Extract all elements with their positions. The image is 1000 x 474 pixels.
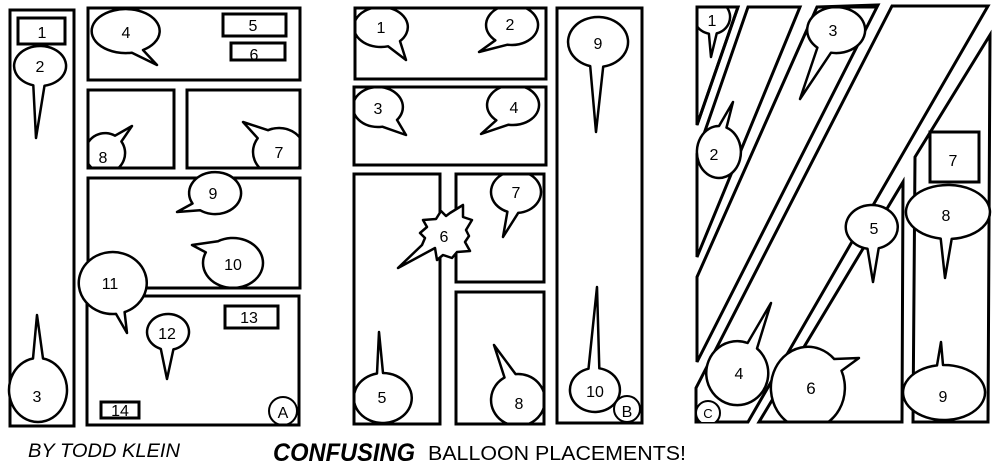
balloon 3 xyxy=(353,87,406,135)
balloon 4 xyxy=(92,9,160,65)
balloon 9 xyxy=(568,17,628,132)
balloon 3: 3 xyxy=(374,101,383,118)
panel: A middle right xyxy=(187,90,305,176)
panel: C 1 triangle xyxy=(694,0,738,125)
balloon 10 xyxy=(570,287,620,412)
page B xyxy=(353,5,642,426)
balloon 7: 7 xyxy=(275,145,284,162)
title xyxy=(273,439,686,467)
label C xyxy=(696,401,720,425)
page A xyxy=(9,8,305,426)
balloon 4 xyxy=(706,303,771,405)
balloon 12 xyxy=(147,314,189,379)
balloon 8: 8 xyxy=(515,396,524,413)
caption box 13: 13 xyxy=(240,310,258,327)
panel: C 6 xyxy=(759,182,903,422)
balloon 1 xyxy=(354,7,408,60)
panel: A top xyxy=(88,8,300,80)
title: BALLOON PLACEMENTS! xyxy=(428,443,686,465)
page label B: B xyxy=(622,404,632,421)
balloon 9 xyxy=(177,172,241,214)
credit: BY TODD KLEIN xyxy=(28,441,180,462)
balloon 3: 3 xyxy=(829,23,838,40)
balloon 10: 10 xyxy=(586,384,604,401)
balloon 3 xyxy=(800,7,878,99)
balloon 4: 4 xyxy=(122,25,131,42)
page label A xyxy=(269,397,297,425)
panel: A middle left xyxy=(85,90,174,173)
caption box 6: 6 xyxy=(250,47,259,64)
caption box 5: 5 xyxy=(249,18,258,35)
page C xyxy=(694,0,990,429)
balloon 6: 6 xyxy=(806,379,816,398)
balloon 1: 1 xyxy=(377,20,386,37)
panel: A bottom xyxy=(87,296,299,425)
balloon 6: burst xyxy=(398,205,472,268)
balloon 4: 4 xyxy=(510,100,519,117)
balloon 12: 12 xyxy=(158,326,176,343)
balloon 6: burst: 6 xyxy=(440,229,449,246)
panel: B centre right xyxy=(456,171,544,282)
balloon 10 xyxy=(192,238,263,288)
balloon 5 xyxy=(846,205,898,282)
balloon 9: 9 xyxy=(209,186,218,203)
panel: A tall left xyxy=(9,10,74,426)
caption box 14: 14 xyxy=(111,403,129,420)
panel: B lower left xyxy=(354,174,440,424)
balloon 11 xyxy=(79,252,147,333)
balloon 4 xyxy=(481,85,539,134)
panel: B tall right xyxy=(557,8,642,423)
balloon 5: 5 xyxy=(870,221,879,238)
panel: C 4 xyxy=(696,6,988,422)
balloon 5 xyxy=(354,332,412,423)
balloon 8 xyxy=(906,185,990,278)
panel: A wide xyxy=(88,172,300,288)
balloon 2 xyxy=(697,102,741,178)
label C: C xyxy=(703,406,713,421)
panel: B second xyxy=(353,85,546,165)
balloon 9 xyxy=(903,342,985,420)
panel: B lower right xyxy=(456,292,545,426)
panel: C 7 8 9 xyxy=(913,35,990,422)
caption box 7 xyxy=(930,132,979,182)
panel: C 3 xyxy=(697,5,878,362)
page label A: A xyxy=(278,405,289,422)
balloon 1: 1 xyxy=(708,13,717,30)
balloon 2 xyxy=(479,5,538,52)
balloon 10: 10 xyxy=(224,257,242,274)
balloon 11: 11 xyxy=(102,276,118,293)
balloon 9: 9 xyxy=(939,389,948,406)
balloon 5: 5 xyxy=(378,390,387,407)
caption box 6 xyxy=(231,43,285,64)
caption box 14 xyxy=(101,402,139,420)
balloon 6 xyxy=(770,346,860,420)
panel: C 2 xyxy=(697,7,800,257)
title: CONFUSING xyxy=(273,439,415,467)
caption box 7: 7 xyxy=(949,153,958,170)
page label B xyxy=(614,396,640,422)
balloon 8: 8 xyxy=(99,150,108,167)
balloon 2: 2 xyxy=(506,17,515,34)
balloon 4: 4 xyxy=(735,366,744,383)
balloon 9: 9 xyxy=(594,36,603,53)
balloon 2: 2 xyxy=(36,59,45,76)
caption box 5 xyxy=(223,14,286,36)
balloon 2: 2 xyxy=(710,147,719,164)
caption box 13 xyxy=(225,306,278,328)
caption box 1 xyxy=(18,18,65,44)
panel: B first xyxy=(354,5,546,79)
balloon 3 xyxy=(9,315,67,422)
balloon 2 xyxy=(14,46,66,138)
balloon 8: 8 xyxy=(942,208,951,225)
balloon 7: 7 xyxy=(512,185,521,202)
balloon 3: 3 xyxy=(33,389,42,406)
caption box 1: 1 xyxy=(38,25,47,42)
